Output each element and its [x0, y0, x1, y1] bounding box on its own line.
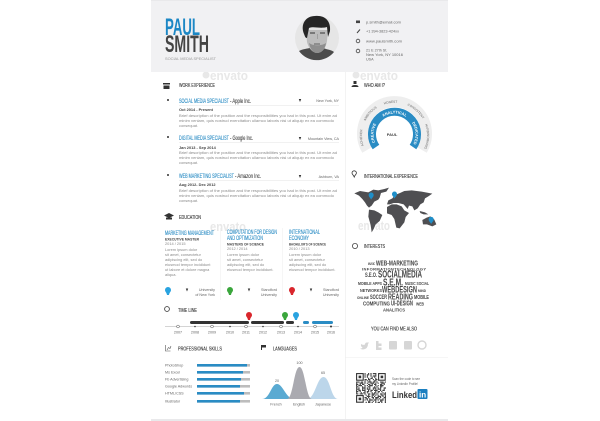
degree: computation for design: sit amet, consectetur: [227, 257, 264, 262]
word cloud: [357, 260, 429, 312]
word cloud: WEB: [416, 302, 425, 306]
heading: interests: INTERESTS: [364, 244, 385, 250]
word cloud: ONLINE: [357, 296, 370, 300]
skill rows: [165, 364, 250, 404]
degree: marketing management: aliqua.: [165, 272, 176, 277]
personality arc gauge: [357, 96, 432, 152]
degree: international economy: BACHELOR'S OF SCIENCE: [289, 242, 326, 246]
job: Amazon: Ashburn, VA: [319, 175, 340, 179]
job: Amazon: consequat.: [179, 198, 198, 203]
skill rows: Google Adwords: [165, 384, 192, 388]
icon: flag: [261, 345, 266, 350]
timeline markers: [246, 312, 299, 320]
watermarks: envato: [210, 219, 246, 234]
watermarks: envato: [360, 68, 398, 83]
language peaks chart: [262, 361, 338, 406]
job: Apple: consequat.: [179, 123, 198, 128]
panel: languages: [261, 345, 338, 406]
heading: languages: LANGUAGES: [273, 346, 297, 352]
language peaks chart: 20: [275, 379, 279, 383]
degree: marketing management: MARKETING MANAGEMENT: [165, 230, 214, 237]
degree: international economy: eiusmod tempor incididunt.: [289, 267, 336, 272]
job: Amazon: [167, 173, 340, 203]
heading: education: EDUCATION: [179, 215, 201, 221]
panel: interests: [352, 243, 429, 312]
job: Google: Brief description of the position and the responsibilities you had in this post. Ut enim ad: [179, 150, 337, 155]
degree: marketing management: University: [199, 288, 215, 292]
degree: marketing management: sit amet, consectetur: [165, 252, 202, 257]
job: Apple: Oct 2014 - Present: [179, 107, 214, 112]
panel: work experience: [163, 83, 340, 203]
word cloud: COMPUTING: [363, 302, 390, 308]
skill rows: PhotoShop: [165, 364, 183, 368]
word cloud: SOCIALMEDIA: [378, 270, 422, 280]
job: Google: Mountain View, CA: [308, 137, 340, 141]
word cloud: S.E.M.: [383, 278, 403, 288]
language peaks chart: English: [293, 402, 305, 406]
degree: international economy: ECONOMY: [289, 235, 309, 242]
job: Amazon: Brief description of the position and the responsibilities you had in this post. Ut enim ad: [179, 188, 337, 193]
job: Google: - Google Inc.: [230, 135, 253, 142]
job: Amazon: WEB MARKETING SPECIALIST: [179, 173, 234, 180]
job: Google: DIGITAL MEDIA SPECIALIST: [179, 135, 229, 142]
job: Apple: - Apple Inc.: [230, 98, 251, 105]
column divider: [344, 72, 347, 419]
degree: computation for design: [227, 229, 277, 297]
timeline axis: 2010: [226, 330, 234, 334]
job: Apple: Brief description of the position and the responsibilities you had in this post. Ut enim ad: [179, 113, 337, 118]
degree: computation for design: adipiscing elit, sed do: [227, 262, 264, 267]
degree: computation for design: Standford: [261, 288, 277, 292]
skill rows: Illustrator: [165, 400, 181, 404]
portrait photo: [295, 16, 339, 60]
degree: international economy: Lorem ipsum dolor: [289, 252, 322, 257]
language peaks chart: French: [270, 402, 282, 406]
column dividers: [220, 228, 282, 300]
word cloud: MOBILE APPS: [358, 281, 382, 286]
degree: computation for design: eiusmod tempor incididunt.: [227, 267, 274, 272]
language peaks chart: 100: [296, 361, 303, 365]
degree: computation for design: 2012 / 2014: [227, 246, 248, 251]
heading: who am I: WHO AM I?: [364, 83, 385, 89]
degree: computation for design: COMPUTATION FOR DESIGN: [227, 229, 277, 236]
word cloud: MUSIC SOCIAL: [405, 281, 429, 286]
section rule: [345, 356, 448, 358]
LinkedIn logo: Linked: [392, 390, 417, 400]
icon: stopwatch: [165, 307, 169, 311]
degree: marketing management: eiusmod tempor incididunt: [165, 262, 211, 267]
contact details: +1 394-3823-424xx: [366, 30, 399, 34]
personality arc gauge: ACHIEVER: [360, 130, 364, 146]
word cloud: INFORMATIONTECHNOLOGY: [362, 266, 426, 272]
name: [165, 14, 209, 58]
job: Amazon: Aug 2012- Dec 2012: [179, 182, 216, 187]
degree: marketing management: EXECUTIVE MASTER: [165, 236, 199, 242]
personality arc gauge: AMBITIOUS: [364, 106, 377, 121]
degree: international economy: sit amet, consectetur: [289, 257, 326, 262]
panel: timeline: [165, 307, 339, 334]
job: Google: [167, 135, 340, 165]
page sheet edges: [151, 0, 448, 421]
LinkedIn logo: in: [419, 390, 426, 400]
watermarks: envato: [358, 218, 390, 233]
contact details: New York, NY 10016: [366, 53, 403, 57]
timeline axis: 2008: [191, 330, 199, 334]
panel: professional skills: [165, 345, 250, 404]
word cloud: MIND: [418, 289, 426, 293]
heading: you can find me also: YOU CAN FIND ME ALSO: [371, 326, 417, 332]
skill rows: HTML/CSS: [165, 392, 184, 396]
word cloud: WEB-MARKETING: [376, 260, 418, 268]
icon: graduation cap: [164, 213, 174, 220]
timeline axis: 2014: [294, 330, 302, 334]
job: Google: minim veniam, quis nostrud exercitation ullamco laboris nisi ut aliquip ex ea commodo: [179, 155, 334, 160]
QR caption: [392, 377, 420, 386]
timeline axis: 2016: [327, 330, 335, 334]
heading: work experience: WORK EXPERIENCE: [179, 83, 215, 89]
timeline axis: 2011: [242, 330, 250, 334]
contact details: [356, 20, 403, 62]
icon: location pin: [352, 171, 356, 177]
timeline axis: 2012: [259, 330, 267, 334]
word cloud: MUSIC: [368, 261, 375, 266]
degree: international economy: INTERNATIONAL: [289, 229, 320, 236]
language peaks chart: 65: [321, 371, 325, 375]
word cloud: SOCCER: [370, 294, 387, 301]
QR code: [356, 373, 386, 403]
skill rows: Ms Excel: [165, 370, 180, 374]
degree: computation for design: Lorem ipsum dolor: [227, 252, 260, 257]
degree: marketing management: Lorem ipsum dolor: [165, 247, 198, 252]
job: Apple: New York, NY: [316, 99, 340, 103]
job: Google: consequat.: [179, 160, 198, 165]
social icons: [360, 341, 426, 350]
panel: who am I: [352, 81, 432, 152]
job: Amazon: minim veniam, quis nostrud exercitation ullamco laboris nisi ut aliquip ex ea commodo: [179, 193, 334, 198]
name: PAUL: [165, 14, 200, 41]
job: Apple: SOCIAL MEDIA SPECIALIST: [179, 98, 229, 105]
timeline axis: 2007: [174, 330, 182, 334]
word cloud: ANALITICS: [383, 308, 405, 312]
word cloud: UI-DESIGN: [391, 300, 413, 308]
degree: international economy: Standford: [323, 288, 339, 292]
panel: international experience: [352, 171, 436, 232]
panel: header: [151, 1, 448, 72]
heading: time line: TIME LINE: [178, 308, 197, 314]
degree: computation for design: University: [261, 293, 277, 297]
icon: person: [352, 81, 358, 87]
degree: international economy: [289, 229, 339, 297]
job subtitle: SOCIAL MEDIA SPECIALIST: [165, 57, 217, 61]
degree: marketing management: of New York: [195, 293, 215, 297]
language peaks chart: Japanese: [315, 402, 331, 406]
name: SMITH: [165, 31, 209, 58]
contact details: USA: [366, 58, 374, 62]
word cloud: S.E.O.: [365, 273, 377, 279]
timeline axis: 2013: [277, 330, 285, 334]
world map: [354, 188, 436, 232]
QR caption: Scan the code to see: [392, 377, 420, 381]
watermarks: [202, 68, 398, 234]
personality arc gauge: HONEST: [384, 100, 398, 104]
degree: international economy: University: [323, 293, 339, 297]
heading: international experience: INTERNATIONAL EXPERIENCE: [364, 174, 418, 180]
job: Amazon: - Amazon Inc.: [235, 173, 261, 180]
personality arc gauge: CONSISTENT: [408, 104, 424, 118]
degree: international economy: adipiscing elit, sed do: [289, 262, 326, 267]
word cloud: MOBILE: [414, 295, 429, 301]
degree: computation for design: AND OPTIMIZATION: [227, 235, 263, 242]
timeline axis: 2015: [311, 330, 319, 334]
personality arc gauge: DEDICATED: [412, 122, 418, 144]
degree: marketing management: 2014 / 2015: [165, 241, 186, 246]
job: Google: Jan 2013 - Sep 2014: [179, 145, 217, 150]
contact details: 21 E 27th St.: [366, 48, 387, 52]
degree: international economy: 2010 / 2013: [289, 246, 310, 251]
word cloud: NETWORKS: [360, 288, 382, 293]
icon: interests badge: [352, 243, 358, 249]
degree: computation for design: MASTERS OF SCIENCE: [227, 242, 264, 246]
contact details: www.paulsmith.com: [366, 40, 402, 44]
degree: marketing management: adipiscing elit, sed do: [165, 257, 202, 262]
timeline axis: 2009: [208, 330, 216, 334]
icon: chart: [166, 345, 171, 351]
timeline axis: [165, 325, 339, 334]
word cloud: READING: [388, 292, 413, 302]
panel: education: [164, 213, 339, 300]
word cloud: WEBDESIGN: [382, 284, 417, 294]
timeline bars: [190, 321, 333, 324]
skill rows: Fb Advertising: [165, 378, 188, 382]
contact details: p.smith@email.com: [366, 20, 401, 24]
personality arc gauge: CREATIVE: [370, 123, 376, 143]
degree: marketing management: [165, 230, 215, 297]
personality arc gauge: HARDWORKING: [424, 124, 430, 149]
personality arc gauge: PAUL: [387, 132, 398, 137]
heading: professional skills: PROFESSIONAL SKILLS: [178, 346, 222, 352]
degree: marketing management: ut labore et dolore magna: [165, 267, 210, 272]
icon: briefcase: [163, 83, 170, 89]
watermarks: envato: [210, 68, 248, 83]
job: Apple: [167, 98, 340, 128]
job: Apple: minim veniam, quis nostrud exercitation ullamco laboris nisi ut aliquip ex ea commodo: [179, 118, 334, 123]
QR caption: my LinkedIn Profile!: [392, 382, 418, 386]
personality arc gauge: ANALYTICAL: [382, 110, 406, 117]
